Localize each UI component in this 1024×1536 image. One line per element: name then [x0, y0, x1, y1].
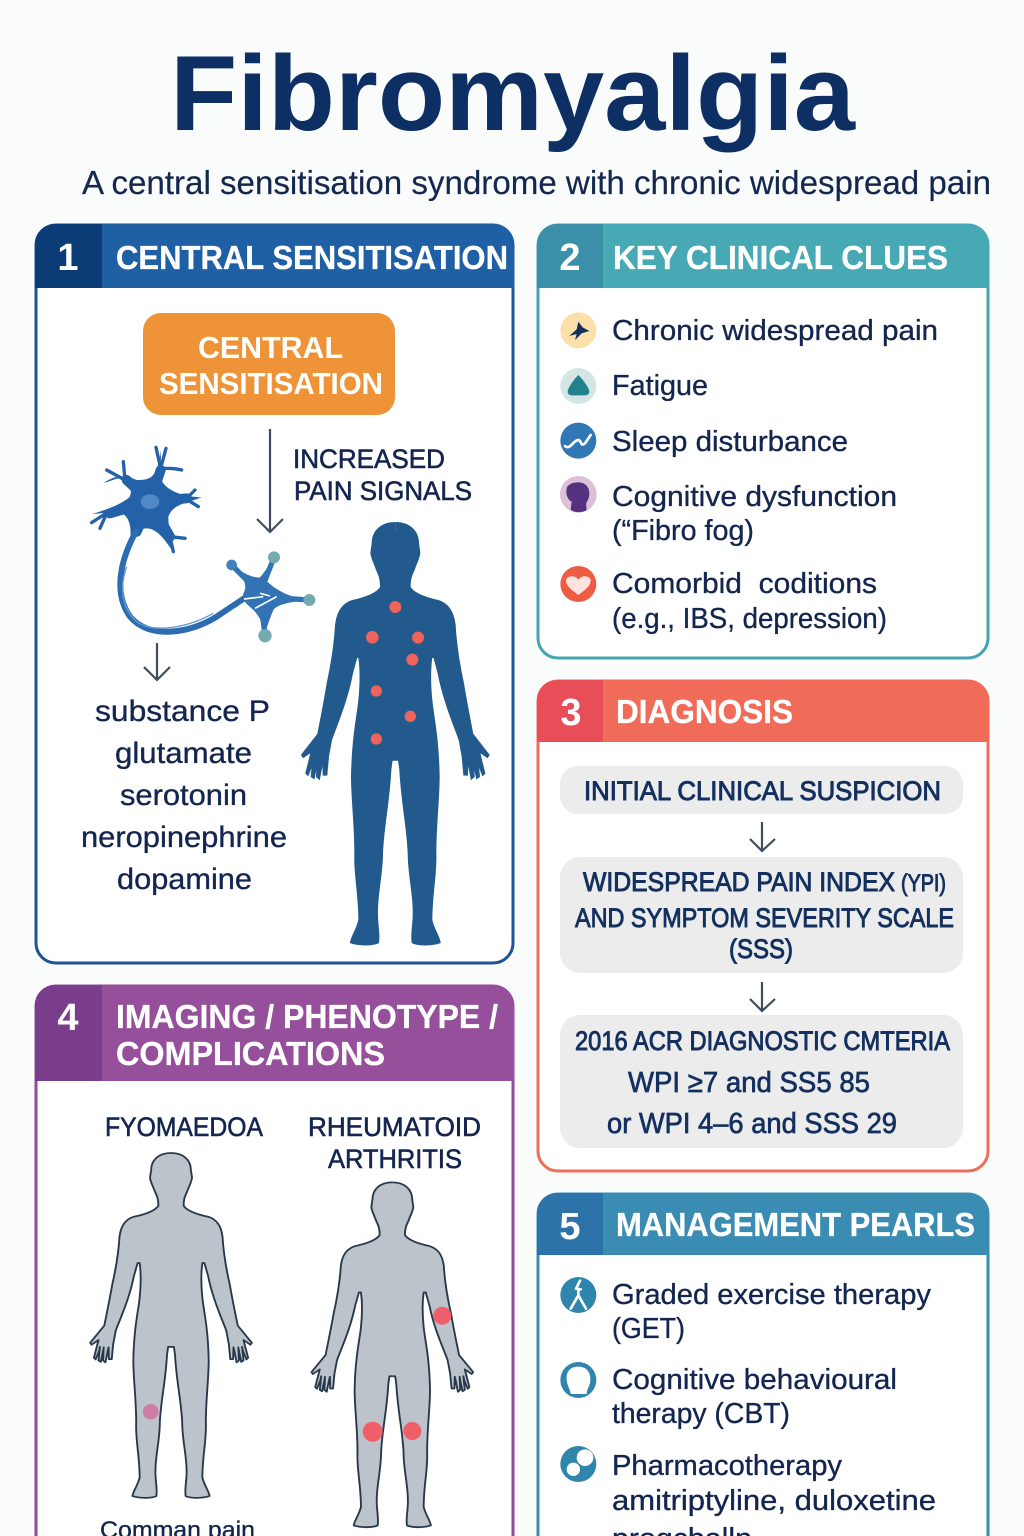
- neurotransmitter list: neropinephrine: [81, 821, 287, 854]
- orange box: central sensitisation: SENSITISATION: [159, 366, 383, 401]
- neurotransmitter list: glutamate: [115, 737, 252, 770]
- icon: head ring: [560, 1362, 596, 1398]
- figure: blue body with tender points: [302, 523, 489, 945]
- panel 2 header: [537, 224, 989, 288]
- panel: diagnosis: [537, 680, 989, 1171]
- label: increased pain signals: PAIN SIGNALS: [294, 476, 472, 506]
- panel 2 header: KEY CLINICAL CLUES: [613, 239, 948, 276]
- panel 1 header: CENTRAL SENSITISATION: [116, 239, 508, 276]
- icon: sleep: [560, 423, 596, 459]
- item: pharmacotherapy: amitriptyline, duloxetine: [612, 1485, 936, 1517]
- item: graded exercise therapy: (GET): [612, 1313, 685, 1345]
- item: sleep disturbance: Sleep disturbance: [612, 426, 848, 458]
- panel 4 header: COMPLICATIONS: [116, 1035, 385, 1072]
- panel 3 header: DIAGNOSIS: [616, 693, 793, 730]
- arrow: step 2 to 3: [750, 982, 775, 1011]
- neurotransmitter list: [81, 695, 287, 896]
- panel 1 header: 1: [57, 237, 79, 279]
- neurotransmitter list: serotonin: [120, 779, 247, 812]
- figure: grey body right: [311, 1182, 473, 1527]
- panel 5 header: 5: [559, 1206, 581, 1248]
- panel: key clinical clues: [537, 224, 989, 658]
- neurotransmitter list: dopamine: [117, 863, 252, 896]
- step: pain index and severity scale: AND SYMPTOM SEVERITY SCALE: [575, 903, 954, 933]
- item: comorbid conditions: (e.g., IBS, depression): [612, 603, 887, 635]
- item: comorbid conditions: [612, 568, 887, 635]
- item: chronic widespread pain: Chronic widespread pain: [612, 315, 938, 347]
- label: rheumatoid arthritis: RHEUMATOID: [308, 1112, 481, 1142]
- step: diagnostic criteria: [560, 1015, 963, 1148]
- label: rheumatoid arthritis: ARTHRITIS: [328, 1144, 462, 1174]
- panel 3 header: [537, 680, 989, 742]
- arrow: down to signals: [257, 429, 283, 532]
- icon: heart: [560, 566, 596, 602]
- item: cognitive behavioural therapy: therapy (CBT): [612, 1398, 790, 1430]
- neurotransmitter list: substance P: [95, 695, 270, 728]
- icon: fatigue: [560, 368, 596, 404]
- title: Fibromyalgia: [170, 33, 857, 153]
- panel 2 header: 2: [559, 237, 581, 279]
- icon: neuron: [92, 447, 315, 642]
- icon: pills: [560, 1446, 596, 1482]
- panel: imaging phenotype complications: [35, 985, 514, 1536]
- subtitle: A central sensitisation syndrome with chronic widespread pain: [82, 164, 991, 201]
- panel: central sensitisation: [35, 224, 514, 963]
- icon: walking figure: [560, 1277, 596, 1313]
- item: cognitive dysfunction: [612, 481, 897, 547]
- label: rheumatoid arthritis: [308, 1112, 481, 1174]
- item: cognitive behavioural therapy: Cognitive behavioural: [612, 1364, 897, 1396]
- label: increased pain signals: [293, 444, 472, 506]
- panel 3 header: 3: [560, 692, 582, 734]
- panel 5 header: MANAGEMENT PEARLS: [616, 1206, 975, 1243]
- item: cognitive behavioural therapy: [612, 1364, 897, 1430]
- panel: management pearls: [537, 1193, 989, 1536]
- item: cognitive dysfunction: Cognitive dysfunction: [612, 481, 897, 513]
- step: initial clinical suspicion: INITIAL CLINICAL SUSPICION: [584, 776, 941, 806]
- step: diagnostic criteria: 2016 ACR DIAGNOSTIC CMTERIA: [575, 1026, 950, 1056]
- item: cognitive dysfunction: (“Fibro fog): [612, 515, 754, 547]
- panel 4 header: IMAGING / PHENOTYPE /: [116, 998, 498, 1035]
- step: pain index and severity scale: (SSS): [729, 934, 793, 964]
- item: graded exercise therapy: [612, 1279, 931, 1345]
- icon: cognitive head: [560, 476, 597, 513]
- orange box: central sensitisation: CENTRAL: [198, 330, 343, 365]
- step: diagnostic criteria: or WPI 4–6 and SSS 29: [607, 1108, 897, 1140]
- step: diagnostic criteria: WPI ≥7 and SS5 85: [628, 1067, 870, 1099]
- figure: grey body left: [90, 1153, 252, 1498]
- label: fibromyalgia figure: FYOMAEDOA: [105, 1112, 263, 1142]
- item: pharmacotherapy: [612, 1450, 936, 1536]
- item: fatigue: Fatigue: [612, 370, 708, 402]
- icon: pain bolt: [560, 312, 596, 348]
- panel 4 header: 4: [57, 997, 79, 1039]
- step: pain index and severity scale: WIDESPREAD PAIN INDEX: [583, 867, 895, 897]
- item: graded exercise therapy: Graded exercise therapy: [612, 1279, 931, 1311]
- arrow: down to neurotransmitters: [144, 643, 170, 680]
- panel 1 header: [35, 224, 514, 288]
- step: pain index and severity scale: [560, 857, 963, 973]
- arrow: step 1 to 2: [750, 822, 775, 851]
- orange box: central sensitisation: [143, 313, 395, 415]
- step: pain index and severity scale: (YPI): [901, 870, 946, 897]
- item: comorbid conditions: Comorbid coditions: [612, 568, 877, 600]
- label: increased pain signals: INCREASED: [293, 444, 445, 474]
- step: initial clinical suspicion: [560, 766, 963, 814]
- panel 4 header: [35, 985, 514, 1081]
- item: pharmacotherapy: Pharmacotherapy: [612, 1450, 842, 1482]
- panel 5 header: [537, 1193, 989, 1255]
